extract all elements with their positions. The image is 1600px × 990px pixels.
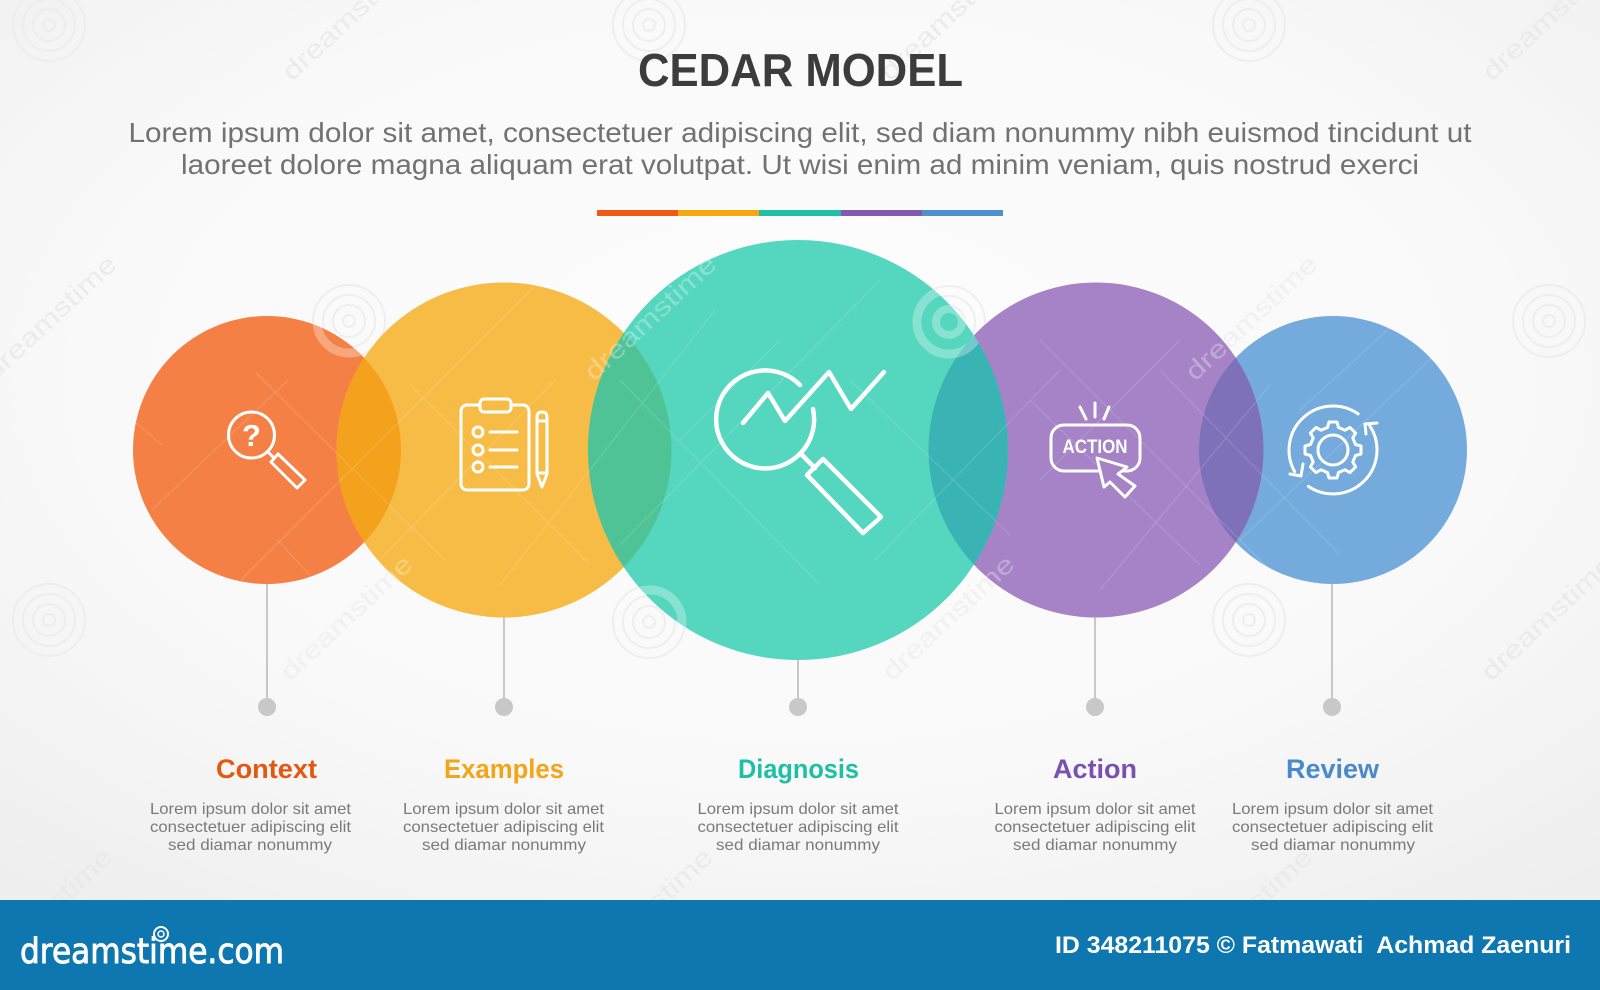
text: diagnosis description: Lorem ipsum dolor sit amet	[698, 801, 899, 818]
circle: context	[133, 316, 401, 584]
text: action description: consectetuer adipiscing elit	[994, 819, 1196, 836]
label: context	[150, 754, 352, 854]
infographic canvas: dreamstime	[578, 249, 722, 386]
infographic canvas: dreamstime	[274, 549, 418, 686]
text: review description: sed diamar nonummy	[1251, 837, 1415, 854]
label: diagnosis	[698, 754, 899, 854]
text: context description	[150, 801, 352, 854]
text: examples description: Lorem ipsum dolor sit amet	[403, 801, 605, 818]
text: examples description: consectetuer adipiscing elit	[403, 819, 605, 836]
infographic canvas: dreamstime	[274, 549, 418, 686]
text: action description: Lorem ipsum dolor sit amet	[994, 801, 1196, 818]
circle: examples	[336, 282, 672, 618]
text: action description: sed diamar nonummy	[1013, 837, 1177, 854]
infographic canvas: dreamstime	[1174, 842, 1318, 979]
text: review description: Lorem ipsum dolor sit amet	[1232, 801, 1434, 818]
text: examples description	[403, 801, 605, 854]
overlap: context and examples	[336, 358, 401, 542]
label: review	[1232, 754, 1434, 854]
infographic canvas: dreamstime	[876, 549, 1020, 686]
icon: magnifier with question mark: ?	[242, 418, 261, 453]
infographic canvas: dreamstime	[574, 842, 718, 979]
overlap: diagnosis and action	[928, 336, 1008, 564]
intro text: Lorem ipsum dolor sit amet, consectetuer adipiscing elit, sed diam nonummy nibh euismod tincidunt ut	[128, 117, 1472, 148]
circle: action	[928, 282, 1264, 618]
overlap: examples and diagnosis	[588, 332, 672, 568]
heading: review: Review	[1286, 754, 1380, 784]
label: examples	[403, 754, 605, 854]
icon: action button: ACTION	[1062, 437, 1128, 458]
text: diagnosis description: consectetuer adipiscing elit	[698, 819, 899, 836]
icon: action button	[1051, 403, 1140, 497]
infographic canvas: dreamstime	[1179, 249, 1323, 386]
text: context description: sed diamar nonummy	[168, 837, 332, 854]
infographic canvas: dreamstime	[1179, 249, 1323, 386]
icon: clipboard and pencil	[461, 399, 547, 490]
text: diagnosis description	[698, 801, 899, 854]
infographic canvas: dreamstime	[1475, 549, 1600, 686]
multicolour divider	[597, 210, 1003, 216]
text: examples description: sed diamar nonummy	[422, 837, 586, 854]
footer credit: ID 348211075 © Fatmawati Achmad Zaenuri	[1055, 932, 1571, 959]
label: action	[994, 754, 1196, 854]
text: diagnosis description: sed diamar nonummy	[716, 837, 880, 854]
text: action description	[994, 801, 1196, 854]
circle: diagnosis	[588, 240, 1008, 660]
circle: review	[1199, 316, 1467, 584]
icon: magnifier with question mark	[228, 412, 305, 488]
intro text: laoreet dolore magna aliquam erat volutpat. Ut wisi enim ad minim veniam, quis nostrud exerci	[181, 149, 1419, 180]
infographic canvas: dreamstime	[876, 549, 1020, 686]
footer band	[0, 900, 1600, 990]
footer logo: dreamstime.com	[20, 932, 284, 972]
heading: action: Action	[1053, 754, 1137, 784]
title: CEDAR MODEL	[638, 44, 963, 96]
text: review description: consectetuer adipiscing elit	[1232, 819, 1434, 836]
text: context description: consectetuer adipiscing elit	[150, 819, 352, 836]
intro text	[128, 117, 1472, 180]
heading: examples: Examples	[444, 754, 564, 784]
icon: gear with rotating arrows	[1289, 406, 1377, 494]
infographic canvas: dreamstime	[578, 249, 722, 386]
overlap: action and review	[1199, 358, 1264, 542]
heading: context: Context	[216, 754, 317, 784]
text: review description	[1232, 801, 1434, 854]
text: context description: Lorem ipsum dolor sit amet	[150, 801, 352, 818]
heading: diagnosis: Diagnosis	[738, 754, 859, 784]
connector stems	[258, 580, 1341, 716]
icon: magnifier with trend line	[716, 370, 884, 533]
